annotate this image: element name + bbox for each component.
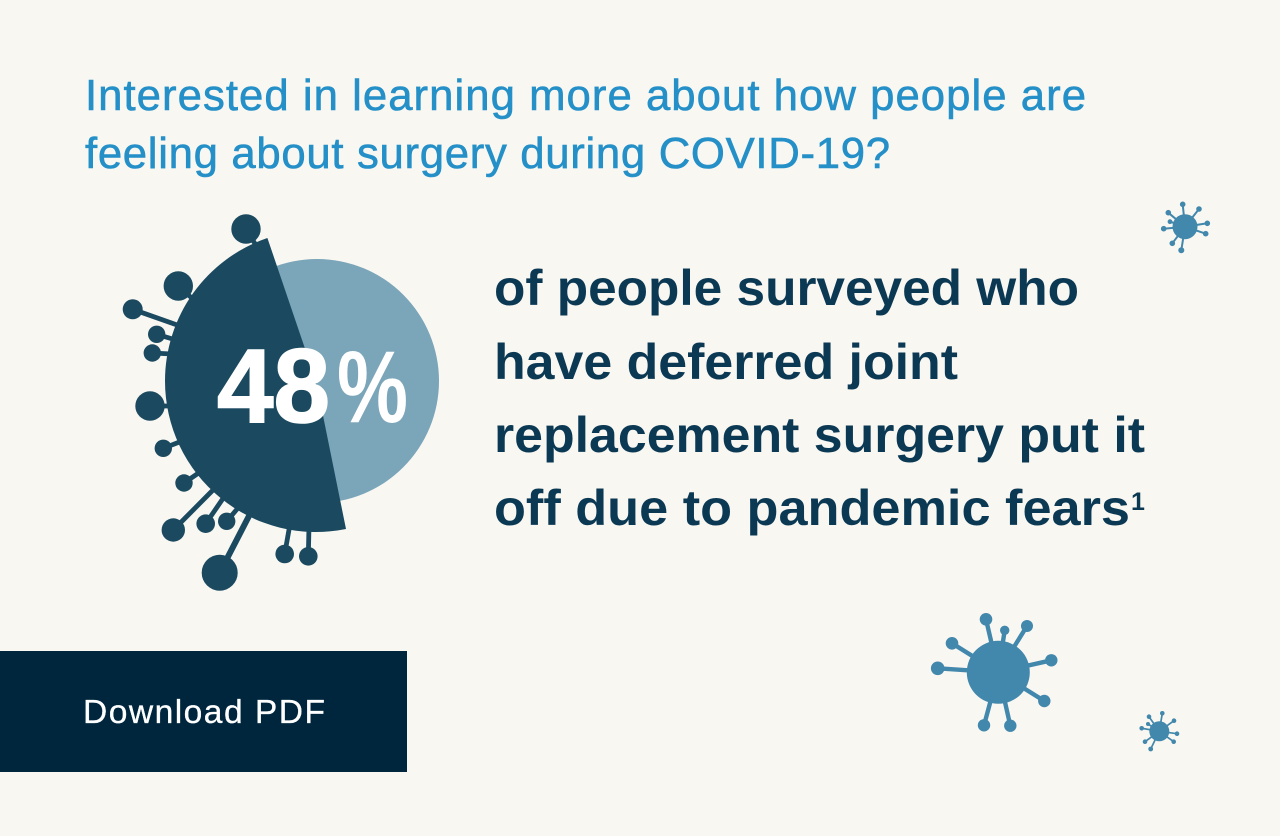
value: 48%: % bbox=[337, 330, 408, 444]
heading bbox=[85, 71, 1086, 178]
pie 48 percent sector bbox=[165, 238, 346, 532]
icon: large virus bbox=[931, 613, 1058, 732]
statement text: of people surveyed who bbox=[494, 260, 1079, 316]
button: download PDF: Download PDF bbox=[83, 694, 325, 731]
icon: small virus top right bbox=[1161, 202, 1210, 253]
value: 48%: 48 bbox=[217, 328, 330, 445]
pie remainder bbox=[195, 259, 439, 503]
value: 48% bbox=[217, 328, 408, 445]
statement text: have deferred joint bbox=[494, 334, 958, 390]
heading: feeling about surgery during COVID-19? bbox=[85, 129, 890, 178]
statement text: off due to pandemic fears bbox=[494, 480, 1130, 536]
button: download PDF bbox=[0, 651, 407, 772]
chart: 48% virus pie bbox=[123, 214, 439, 591]
heading: Interested in learning more about how people are bbox=[85, 71, 1086, 120]
statement text: replacement surgery put it bbox=[494, 407, 1145, 463]
icon: small virus bottom right bbox=[1139, 711, 1179, 751]
virus spikes bbox=[123, 214, 318, 591]
statement text: 1 bbox=[1131, 488, 1145, 516]
statement text bbox=[494, 260, 1145, 536]
